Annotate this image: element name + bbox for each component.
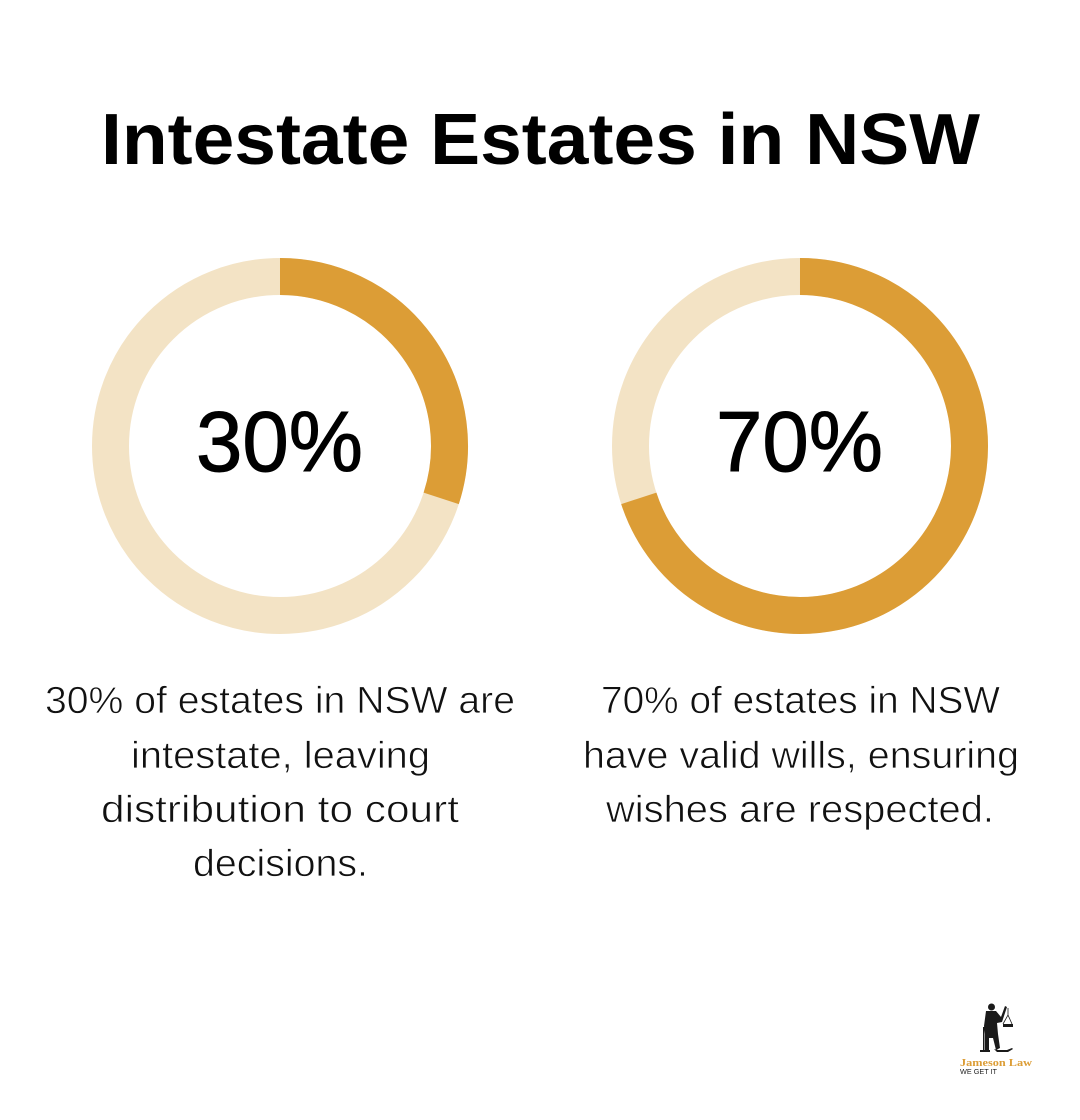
description: 70%: 70% of estates in NSW	[601, 680, 1000, 722]
panel: 30% intestate	[45, 276, 515, 885]
description: 30%: 30% of estates in NSW are	[45, 680, 515, 722]
description: 70%: have valid wills, ensuring	[583, 735, 1019, 777]
description: 70%	[583, 680, 1019, 831]
description: 30%	[45, 680, 515, 885]
title: Intestate Estates in NSW	[101, 100, 980, 180]
logo tagline: WE GET IT	[960, 1069, 998, 1076]
description: 30%: intestate, leaving	[131, 735, 430, 777]
panel: 70% valid wills	[583, 276, 1019, 831]
icon: lady justice	[980, 1004, 1013, 1052]
donut chart: 70%	[630, 276, 970, 616]
logo: Jameson Law	[960, 1004, 1032, 1076]
description: 30%: distribution to court	[101, 789, 459, 831]
logo name: Jameson Law	[960, 1058, 1032, 1069]
value: 30%: 30%	[196, 395, 363, 490]
description: 70%: wishes are respected.	[605, 789, 994, 831]
description: 30%: decisions.	[193, 843, 368, 885]
value: 70%: 70%	[716, 395, 883, 490]
donut chart: 30%	[110, 276, 450, 616]
